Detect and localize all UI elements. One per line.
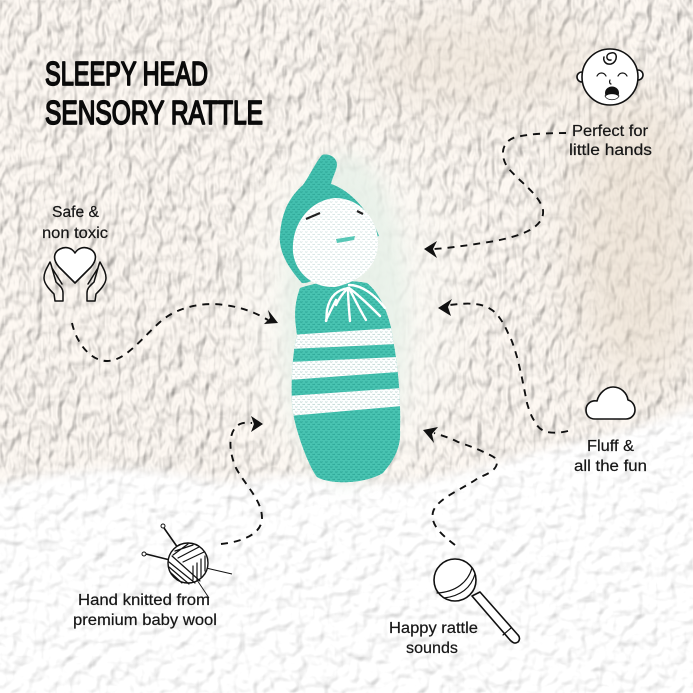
icon: baby face [577, 49, 643, 105]
label: happy rattle sounds: Happy rattle [389, 620, 478, 637]
dashed arrow: hand knitted [221, 416, 263, 544]
label: safe and non toxic: Safe & [52, 204, 100, 221]
label: fluff and all the fun [574, 438, 647, 475]
feature: perfect for little hands [569, 49, 652, 159]
doll hat [280, 155, 379, 283]
label: hand knitted from premium baby wool: premium baby wool [73, 612, 217, 629]
label: happy rattle sounds [389, 620, 478, 657]
label: perfect for little hands: Perfect for [572, 123, 648, 140]
icon: hands holding heart [44, 248, 106, 301]
label: fluff and all the fun: Fluff & [587, 438, 635, 455]
label: safe and non toxic: non toxic [42, 225, 108, 242]
doll yarn tassel [326, 285, 385, 321]
feature: hand knitted from premium baby wool [73, 524, 232, 629]
label: fluff and all the fun: all the fun [574, 458, 647, 475]
label: hand knitted from premium baby wool [73, 592, 217, 629]
icon: ball of wool with needles [142, 524, 232, 598]
label: perfect for little hands [569, 123, 652, 159]
feature: safe and non toxic [42, 204, 108, 301]
doll face [293, 198, 378, 287]
dashed arrow: safe and non toxic [72, 304, 278, 361]
doll shadow [283, 155, 407, 485]
label: perfect for little hands: little hands [569, 142, 652, 159]
doll eyes and mouth [306, 211, 363, 243]
dashed arrow: fluff and fun [438, 299, 568, 433]
dashed arrow: perfect for little hands [424, 133, 566, 258]
icon: cloud [586, 387, 635, 419]
title: SLEEPY HEAD [45, 55, 208, 92]
dashed arrow: happy rattle sounds [423, 427, 497, 545]
feature: fluff and all the fun [574, 387, 647, 475]
knitted doll rattle [280, 155, 407, 485]
title [45, 55, 263, 131]
icon: rattle [434, 559, 520, 643]
label: happy rattle sounds: sounds [406, 640, 458, 657]
label: safe and non toxic [42, 204, 108, 242]
label: hand knitted from premium baby wool: Hand knitted from [78, 592, 210, 609]
title: SENSORY RATTLE [45, 94, 263, 131]
doll body [288, 281, 402, 482]
background: lower white fleece [0, 407, 693, 693]
feature: happy rattle sounds [389, 559, 520, 657]
